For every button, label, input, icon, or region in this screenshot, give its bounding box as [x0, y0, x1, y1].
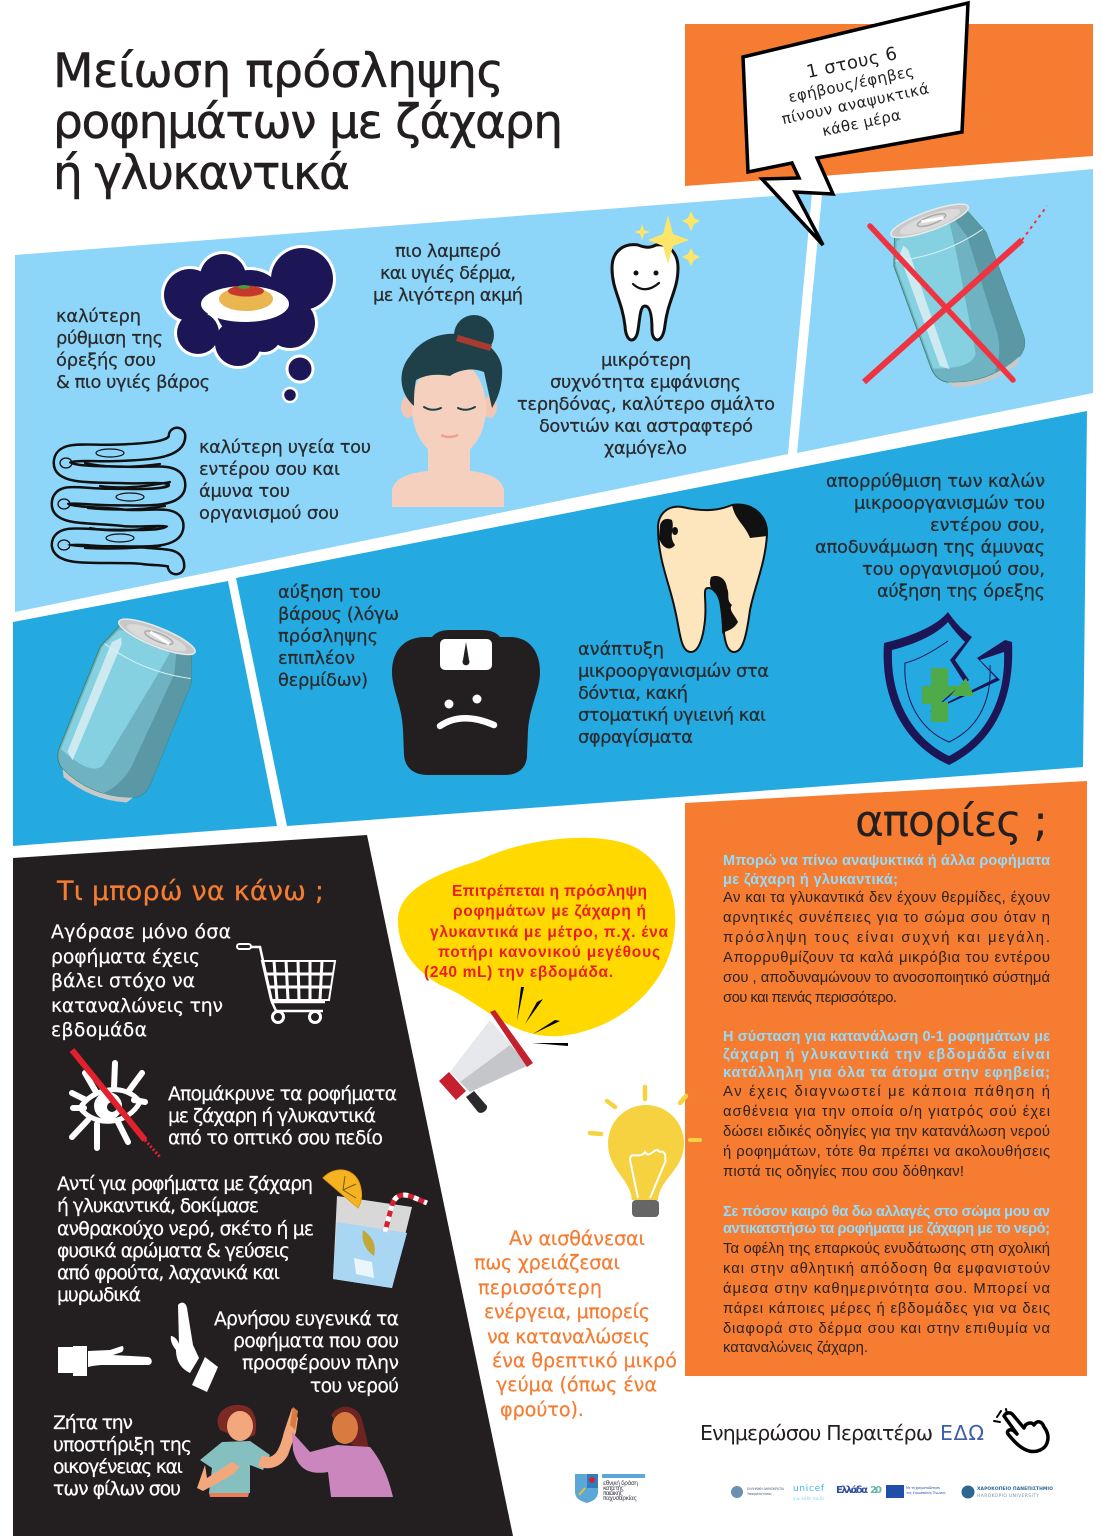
text: question 3: διαφορά στο δέρμα σου και στην επιθυμία να — [723, 1321, 1050, 1337]
text: remove from sight: Απομάκρυνε τα ροφήματα — [168, 1084, 397, 1105]
text: need energy: περισσότερη — [478, 1276, 602, 1299]
text: gut microorganisms: απορρύθμιση των καλών — [826, 471, 1045, 492]
text: question 2: ζάχαρη ή γλυκαντικά την εβδομάδα είναι — [723, 1047, 1050, 1063]
text: question 1: Απορρυθμίζουν τα καλά μικρόβια του εντέρου — [723, 950, 1050, 966]
text: gut benefit: καλύτερη υγεία του — [199, 437, 371, 458]
text: microorganisms in teeth: μικροοργανισμών στα — [578, 661, 769, 682]
text: allowed intake: Επιτρέπεται η πρόσληψη — [452, 883, 647, 900]
text: microorganisms in teeth: δόντια, κακή — [578, 683, 688, 704]
text: weight gain — [278, 582, 399, 691]
text: learn more: Ενημερώσου Περαιτέρω — [700, 1421, 933, 1445]
logos: partner strip: unicef — [793, 1484, 825, 1494]
text: gut benefit — [199, 437, 371, 524]
speech bubble: 1 στους 6 — [805, 43, 899, 83]
panel: can dark blue — [13, 581, 277, 846]
text: ask support: των φίλων σου — [53, 1479, 181, 1500]
text: question 1: σου και πεινάς περισσότερο. — [723, 990, 897, 1006]
text: question 2 — [723, 1029, 1050, 1180]
text: question 1: αρνητικές συνέπειες για το σώμα σου όταν η — [723, 910, 1050, 926]
icon: drink glass — [323, 1170, 427, 1288]
text: remove from sight: από το οπτικό σου πεδίο — [168, 1128, 383, 1149]
text: question 3 — [723, 1204, 1050, 1356]
text: ask support — [53, 1413, 192, 1500]
title: Μείωση πρόσληψης — [53, 44, 504, 99]
text: question 3: Σε πόσον καιρό θα δω αλλαγές στο σώμα μου αν — [723, 1204, 1050, 1220]
text: appetite: καλύτερη — [56, 306, 141, 327]
text: question 2: ασθένεια για την οποία ο/η γιατρός σού έχει — [723, 1104, 1050, 1120]
text: question 3: Τα οφέλη της επαρκούς ενυδάτωσης στη σχολική — [723, 1241, 1050, 1257]
text: teeth benefit: μικρότερη — [601, 350, 691, 371]
panel: benefits light blue — [15, 193, 812, 612]
text: teeth benefit: χαμόγελο — [604, 438, 687, 459]
logo: national action shield: εθνική δράση — [603, 1480, 638, 1487]
icon: decayed tooth — [658, 505, 767, 652]
text: question 1: σου , αποδυναμώνουν το ανοσοποιητικό σύστημά — [723, 970, 1050, 986]
text: microorganisms in teeth: ανάπτυξη — [578, 639, 664, 660]
icon: happy tooth — [612, 211, 700, 340]
text: need energy: ένα θρεπτικό μικρό — [492, 1349, 677, 1372]
icon: pointing hand — [994, 1409, 1048, 1452]
text: buy only — [51, 922, 231, 1041]
text: alternatives: φυσικά αρώματα & γεύσεις — [57, 1241, 290, 1262]
text: teeth benefit: δοντιών και αστραφτερό — [539, 416, 753, 437]
text: alternatives: ή γλυκαντικά, δοκίμασε — [57, 1196, 259, 1217]
logos: partner strip: ΧΑΡΟΚΟΠΕΙΟ ΠΑΝΕΠΙΣΤΗΜΙΟ — [977, 1486, 1053, 1492]
icon: can — [48, 610, 206, 813]
text: teeth benefit — [517, 350, 775, 459]
text: question 1: Αν και τα γλυκαντικά δεν έχουν θερμίδες, έχουν — [723, 890, 1050, 906]
text: learn more: ΕΔΩ — [940, 1421, 984, 1445]
icon: woman face — [392, 315, 504, 507]
icon: intestines — [58, 436, 177, 566]
text: teeth benefit: τερηδόνας, καλύτερο σμάλτο — [517, 394, 775, 415]
text: need energy — [474, 1227, 677, 1421]
logos: partner strip: Με τη χρηματοδότηση — [906, 1486, 940, 1490]
text: need energy: να καταναλώσεις — [487, 1325, 650, 1348]
text: buy only: εβδομάδα — [51, 1020, 147, 1041]
text: buy only: ροφήματα έχεις — [51, 947, 200, 968]
text: weight gain: αύξηση του — [278, 582, 381, 603]
text: question 2: δώσει ειδικές οδηγίες για την κατανάλωση νερού — [723, 1124, 1050, 1140]
text: buy only: βάλει στόχο να — [51, 971, 195, 992]
text: gut microorganisms — [815, 471, 1045, 602]
title: ή γλυκαντικά — [53, 146, 350, 201]
speech bubble: κάθε μέρα — [820, 106, 903, 140]
logo: national action shield: παχυσαρκίας — [603, 1495, 637, 1502]
text: appetite: όρεξής σου — [56, 350, 156, 371]
icon: refusing hands — [58, 1303, 218, 1392]
icon: light bulb — [590, 1087, 700, 1217]
text: question 2: Αν έχεις διαγνωστεί με κάποια πάθηση ή — [723, 1084, 1050, 1100]
text: allowed intake: ροφημάτων με ζάχαρη ή — [453, 903, 646, 920]
logos: partner strip: Ελλάδα — [836, 1484, 868, 1496]
logos: partner strip: Υπουργείο Υγείας — [747, 1492, 772, 1496]
icon: yellow speech blob — [398, 838, 675, 1036]
text: question 1: πρόσληψη τους είναι συχνή και μεγάλη. — [723, 930, 1050, 946]
icon: shopping cart — [237, 944, 335, 1022]
panel: can with X light blue — [797, 169, 1093, 453]
text: refuse politely: προσφέρουν πλην — [242, 1353, 399, 1374]
text: alternatives — [57, 1174, 314, 1306]
text: question 1 — [723, 853, 1050, 1006]
text: remove from sight — [168, 1084, 397, 1149]
icon: sad scale — [392, 630, 540, 775]
text: gut microorganisms: εντέρου σου, — [930, 515, 1045, 536]
text: need energy: Αν αισθάνεσαι — [509, 1227, 645, 1250]
text: question 3: άμεσα στην καθημερινότητα σου. Μπορεί να — [723, 1281, 1050, 1297]
text: weight gain: πρόσληψης — [278, 626, 378, 647]
text: microorganisms in teeth: στοματική υγιεινή και — [578, 705, 766, 726]
text: gut microorganisms: αποδυνάμωση της άμυνας — [815, 537, 1045, 558]
text: skin: και υγιές δέρμα, — [380, 263, 516, 284]
text: refuse politely: του νερού — [310, 1376, 399, 1397]
title: ροφημάτων με ζάχαρη — [53, 95, 563, 150]
text: alternatives: από φρούτα, λαχανικά και — [57, 1263, 280, 1284]
logo: national action shield: κατά της — [603, 1485, 624, 1492]
logos: partner strip: ΕΛΛΗΝΙΚΗ ΔΗΜΟΚΡΑΤΙΑ — [747, 1487, 785, 1491]
text: question 3: καταναλώνεις ζάχαρη. — [723, 1340, 868, 1356]
text: gut microorganisms: αύξηση της όρεξης — [877, 581, 1045, 602]
text: weight gain: βάρους (λόγω — [278, 604, 399, 625]
text: microorganisms in teeth — [578, 639, 769, 748]
text: allowed intake: (240 mL) την εβδομάδα. — [424, 964, 613, 981]
heading: what can I do: Τι μπορώ να κάνω ; — [56, 876, 324, 907]
text: question 2: ή ροφημάτων, τότε θα πρέπει να ακολουθήσεις — [723, 1144, 1050, 1160]
text: need energy: ενέργεια, μπορείς — [484, 1300, 650, 1323]
text: question 2: πιστά τις οδηγίες που σου δόθηκαν! — [723, 1164, 964, 1180]
text: gut microorganisms: μικροοργανισμών του — [854, 493, 1045, 514]
text: question 3: και στην αθλητική απόδοση θα εμφανιστούν — [723, 1261, 1050, 1277]
text: allowed intake: γλυκαντικά με μέτρο, π.χ. ένα — [430, 924, 668, 941]
panel: orange top — [685, 24, 1093, 186]
text: question 1: Μπορώ να πίνω αναψυκτικά ή άλλα ροφήματα — [723, 853, 1050, 869]
panel: questions orange — [685, 781, 1087, 1376]
text: allowed intake — [424, 883, 668, 981]
text: allowed intake: ποτήρι κανονικού μεγέθους — [438, 944, 660, 961]
text: question 1: με ζάχαρη ή γλυκαντικά; — [723, 872, 898, 888]
text: remove from sight: με ζάχαρη ή γλυκαντικά — [168, 1106, 376, 1127]
text: microorganisms in teeth: σφραγίσματα — [578, 727, 693, 748]
text: gut benefit: εντέρου σου και — [199, 459, 340, 480]
icon: two people high five — [197, 1405, 393, 1497]
text: ask support: Ζήτα την — [53, 1413, 133, 1434]
text: ask support: οικογένειας και — [53, 1457, 183, 1478]
logos: partner strip — [731, 1484, 1053, 1501]
text: appetite: ρύθμιση της — [56, 328, 163, 349]
text: refuse politely — [214, 1309, 399, 1397]
icon: thought bubble with plate — [161, 245, 336, 402]
icon: can crossed out — [864, 195, 1047, 398]
logos: partner strip: HAROKOPIO UNIVERSITY — [977, 1493, 1039, 1499]
text: weight gain: επιπλέον — [278, 648, 355, 669]
text: appetite — [56, 306, 210, 393]
text: skin: πιο λαμπερό — [395, 241, 501, 262]
text: ask support: υποστήριξη της — [53, 1435, 192, 1456]
icon: broken shield — [884, 612, 1012, 765]
text: appetite: & πιο υγιές βάρος — [56, 372, 210, 393]
title — [53, 44, 563, 201]
icon: megaphone — [439, 987, 568, 1113]
logos: partner strip: 2.0 — [870, 1485, 882, 1496]
text: weight gain: θερμίδων) — [278, 670, 368, 691]
logo: national action shield: παιδικής — [603, 1490, 623, 1497]
text: alternatives: μυρωδικά — [57, 1285, 141, 1306]
text: buy only: καταναλώνεις την — [51, 996, 223, 1017]
text: refuse politely: Αρνήσου ευγενικά τα — [214, 1309, 399, 1330]
text: gut benefit: άμυνα του — [199, 481, 290, 502]
text: alternatives: Αντί για ροφήματα με ζάχαρη — [57, 1174, 313, 1195]
speech bubble — [743, 3, 968, 245]
panel: harms dark blue — [236, 411, 1087, 826]
text: alternatives: ανθρακούχο νερό, σκέτο ή με — [57, 1219, 314, 1240]
speech bubble: πίνουν αναψυκτικά — [780, 79, 931, 128]
heading: questions: απορίες ; — [855, 796, 1048, 847]
text: gut benefit: οργανισμού σου — [199, 503, 339, 524]
text: gut microorganisms: του οργανισμού σου, — [862, 559, 1045, 580]
text: need energy: φρούτο). — [500, 1398, 584, 1421]
logos: partner strip: για κάθε παιδί — [793, 1496, 825, 1501]
text: need energy: πως χρειάζεσαι — [474, 1251, 620, 1274]
text: buy only: Αγόρασε μόνο όσα — [51, 922, 231, 943]
text: question 3: πάρει κάποιες μέρες ή εβδομάδες για να δεις — [723, 1301, 1050, 1317]
text: refuse politely: ροφήματα που σου — [233, 1331, 399, 1352]
text: skin: με λιγότερη ακμή — [373, 285, 523, 306]
text: question 2: κατάλληλη για όλα τα άτομα στην εφηβεία; — [723, 1065, 1050, 1081]
panel: what can I do black — [13, 835, 513, 1536]
logo: national action shield — [575, 1474, 645, 1503]
logos: partner strip: της Ευρωπαϊκής Ένωσης — [906, 1491, 946, 1495]
text: question 3: αντικατστήσω τα ροφήματα με ζάχαρη με το νερό; — [723, 1221, 1050, 1237]
text: skin — [373, 241, 523, 306]
speech bubble: εφήβους/έφηβες — [787, 62, 916, 106]
text: question 2: Η σύσταση για κατανάλωση 0-1 ροφημάτων με — [723, 1029, 1050, 1045]
text: teeth benefit: συχνότητα εμφάνισης — [550, 372, 741, 393]
text: need energy: γεύμα (όπως ένα — [496, 1373, 657, 1396]
icon: crossed eye — [72, 1050, 160, 1157]
